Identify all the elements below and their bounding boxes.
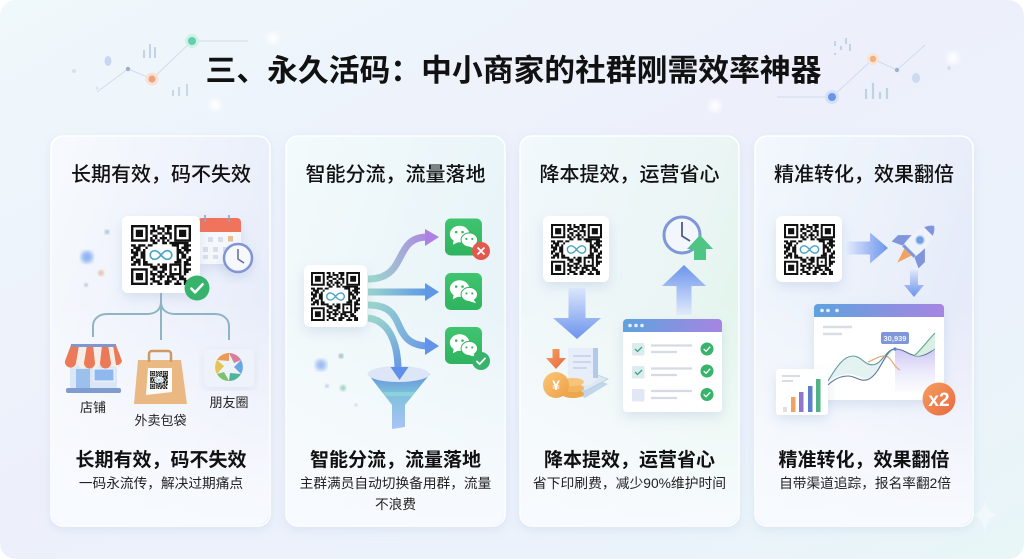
- arrow: to group 2: [368, 283, 439, 301]
- icon: store: [65, 344, 122, 393]
- icon: WeChat full group: [445, 218, 490, 260]
- heading: 降本提效，运营省心: [540, 163, 720, 186]
- panel: 长期有效: [51, 136, 270, 526]
- QR code card: [304, 265, 367, 327]
- icon: WeChat backup group: [445, 327, 490, 370]
- label: 店铺: 店铺: [80, 400, 106, 415]
- connector lines: [93, 293, 229, 340]
- caption text: 省下印刷费，减少90%维护时间: [533, 476, 726, 491]
- arrow: down: [553, 288, 601, 339]
- icon: rocket: [884, 212, 948, 276]
- label: 外卖包装: 外卖包袋: [134, 413, 187, 428]
- label: 朋友圈: 朋友圈: [209, 395, 249, 410]
- heading: 智能分流，流量落地: [306, 163, 486, 186]
- icon: moments aperture: [204, 349, 254, 387]
- caption text: 一码永流传，解决过期痛点: [79, 475, 243, 491]
- arrow: cost down: [546, 349, 566, 369]
- icon: WeChat group: [445, 273, 482, 310]
- header decoration: right data network: [709, 38, 959, 112]
- arrow: down to chart: [904, 270, 924, 297]
- caption heading: 智能分流，流量落地: [310, 449, 481, 471]
- caption heading: 降本提效，运营省心: [544, 449, 715, 471]
- title: 三、永久活码：中小商家的社群刚需效率神器: [206, 53, 822, 88]
- mini bar chart card: [776, 369, 828, 415]
- caption text: 主群满员自动切换备用群，流量: [300, 475, 492, 491]
- arrow: up: [662, 265, 706, 315]
- caption text: 自带渠道追踪，报名率翻2倍: [779, 475, 951, 491]
- icon: takeout bag with QR: [134, 351, 187, 404]
- icon: clock: [224, 244, 252, 272]
- decorative dots: [316, 354, 358, 406]
- arrow: to group 3: [368, 305, 439, 355]
- header decoration: left data network: [72, 32, 279, 111]
- icon: coins: [543, 372, 584, 398]
- QR code card: [776, 216, 842, 282]
- heading: 精准转化，效果翻倍: [774, 163, 954, 186]
- dashboard window: [623, 319, 722, 412]
- heading: 长期有效，码不失效: [71, 163, 251, 186]
- decorative dots: [81, 230, 110, 287]
- badge: x2: [922, 382, 956, 416]
- decorative sparkle: [972, 500, 998, 532]
- chart window: [814, 304, 944, 400]
- panel: 降本提效: [520, 136, 739, 526]
- icon: coins: ¥: [552, 377, 560, 393]
- arrow: to funnel: [368, 318, 408, 380]
- icon: calendar: [198, 215, 241, 264]
- QR code card: [543, 216, 609, 282]
- data tag: 30,939: [884, 334, 906, 343]
- icon: paper stack: [565, 348, 608, 398]
- panel: 智能分流: 不浪费: [375, 497, 416, 512]
- caption heading: 长期有效，码不失效: [75, 449, 247, 471]
- caption heading: 精准转化，效果翻倍: [778, 448, 950, 471]
- icon: check badge: [184, 276, 210, 300]
- arrow: right: [846, 232, 888, 264]
- icon: clock up: [664, 217, 713, 260]
- icon: funnel: [368, 366, 430, 429]
- badge: x2: x2: [928, 390, 950, 411]
- panel: 精准转化: [755, 136, 973, 526]
- arrow: to group 1: [368, 229, 439, 279]
- QR code card: [122, 216, 200, 293]
- panel: 智能分流: [286, 136, 505, 526]
